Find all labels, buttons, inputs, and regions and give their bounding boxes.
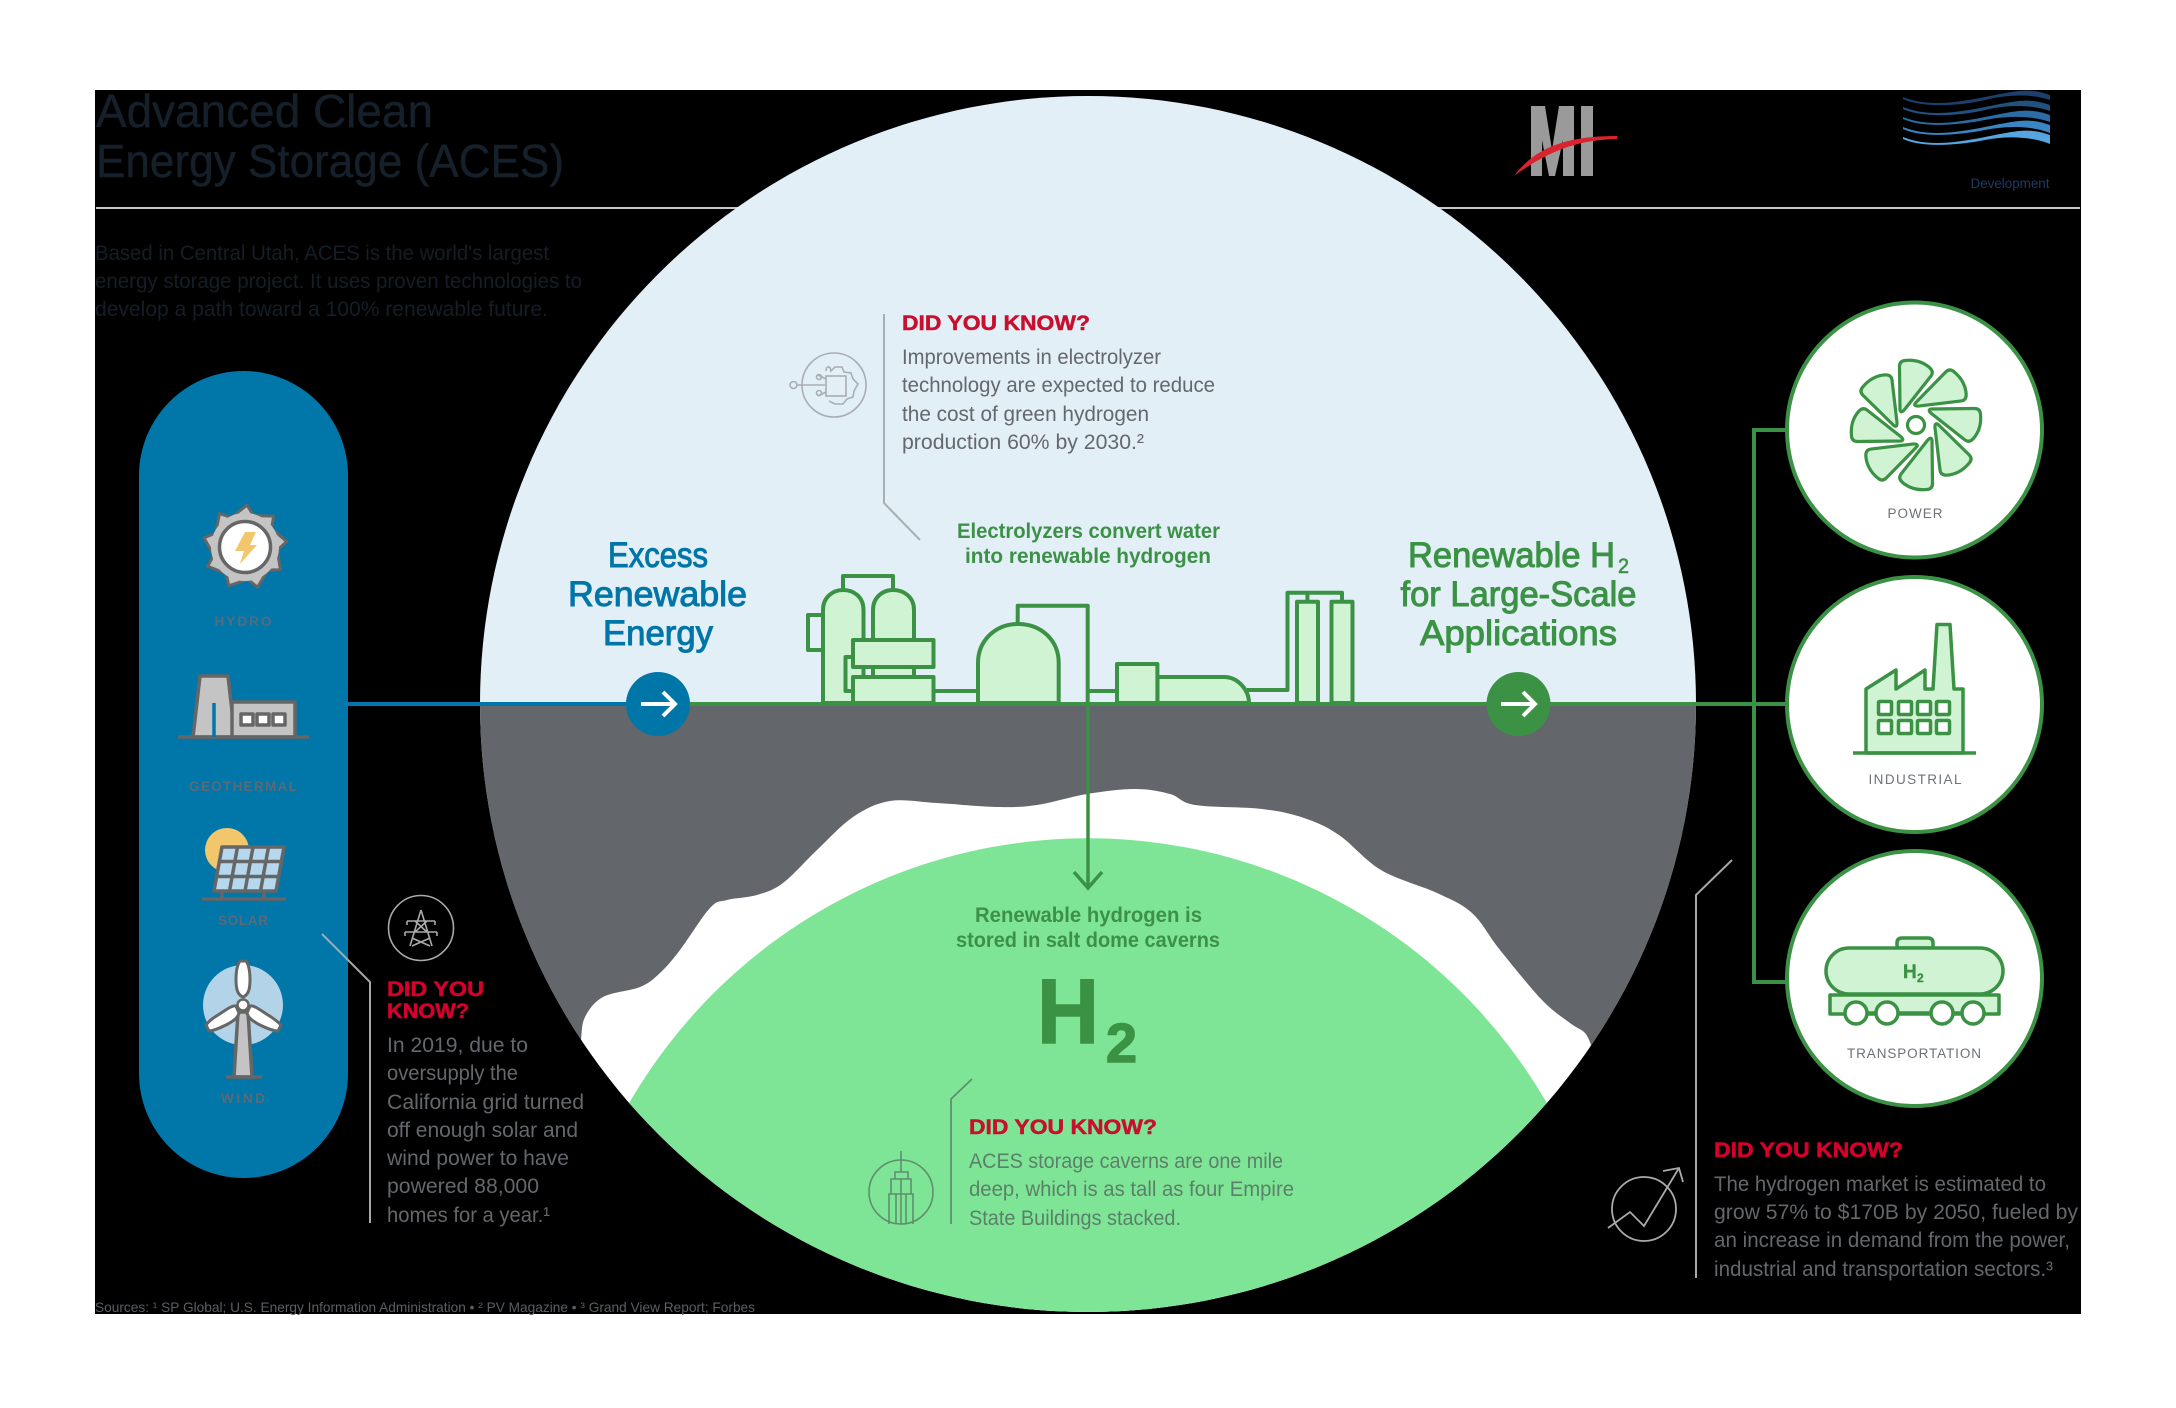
body text: State Buildings stacked. bbox=[969, 1207, 1181, 1230]
header divider bbox=[96, 207, 2080, 209]
heading: renewable H2: for Large-Scale bbox=[1400, 575, 1636, 614]
text: caverns: stored in salt dome caverns bbox=[956, 929, 1220, 952]
heading: renewable H2: Renewable H bbox=[1408, 536, 1615, 575]
heading: excess renewable energy: Excess bbox=[608, 536, 708, 575]
heading: DID YOU KNOW? bbox=[969, 1116, 1157, 1139]
connector: application bus bbox=[1754, 430, 1786, 982]
body text: powered 88,000 bbox=[387, 1175, 539, 1198]
label: TRANSPORTATION bbox=[1847, 1046, 1981, 1061]
callout: hydrogen market bbox=[1608, 860, 2078, 1281]
leader line bbox=[884, 314, 920, 540]
body text: oversupply the bbox=[387, 1062, 518, 1085]
body text: Improvements in electrolyzer bbox=[902, 346, 1161, 369]
heading: renewable H2: Applications bbox=[1420, 614, 1617, 653]
icon: green arrow bbox=[1486, 672, 1550, 736]
body text bbox=[969, 1150, 1294, 1230]
body text: California grid turned bbox=[387, 1091, 584, 1114]
icon: geothermal bbox=[178, 676, 309, 737]
panel: renewable sources pill bbox=[139, 371, 348, 1178]
label: INDUSTRIAL bbox=[1868, 772, 1962, 787]
underground bbox=[480, 706, 1696, 1103]
title: Energy Storage (ACES) bbox=[96, 135, 564, 187]
heading: KNOW? bbox=[387, 1000, 469, 1023]
body text: grow 57% to $170B by 2050, fueled by bbox=[1714, 1201, 2078, 1224]
electrolyzer plant bbox=[808, 576, 1352, 703]
label: geothermal: GEOTHERMAL bbox=[189, 779, 297, 794]
heading: DID YOU bbox=[387, 978, 484, 1001]
body text: an increase in demand from the power, bbox=[1714, 1229, 2070, 1252]
leader line bbox=[951, 1079, 972, 1224]
body text: wind power to have bbox=[386, 1147, 569, 1170]
sources: Sources: ¹ SP Global; U.S. Energy Information Administration • ² PV Magazine • ³ Grand View Report; Forbes bbox=[95, 1299, 755, 1315]
callout: caverns depth bbox=[869, 1079, 1294, 1230]
salt dome bbox=[581, 789, 1592, 1312]
body text: industrial and transportation sectors.³ bbox=[1714, 1258, 2053, 1281]
connector: hydrogen line bbox=[658, 702, 1788, 706]
leader line bbox=[322, 934, 370, 1223]
callout: California oversupply bbox=[322, 896, 584, 1227]
label: wind: WIND bbox=[221, 1091, 265, 1106]
text: electrolyzers: into renewable hydrogen bbox=[965, 545, 1211, 568]
label: hydro: HYDRO bbox=[214, 614, 272, 629]
label: POWER bbox=[1888, 506, 1943, 521]
intro text: energy storage project. It uses proven technologies to bbox=[95, 270, 582, 293]
central tank bbox=[1018, 606, 1117, 703]
icon: chip gear bbox=[790, 353, 866, 417]
leader line bbox=[1696, 860, 1732, 1278]
title: Advanced Clean bbox=[96, 85, 433, 137]
icon: wind bbox=[203, 961, 283, 1077]
heading: excess renewable energy bbox=[568, 536, 747, 653]
heading: excess renewable energy: Energy bbox=[603, 614, 713, 653]
text: caverns bbox=[956, 904, 1220, 952]
heading: renewable H2: 2 bbox=[1618, 555, 1629, 578]
callout: electrolyzer cost bbox=[790, 312, 1215, 540]
body text bbox=[1714, 1173, 2078, 1281]
label: solar: SOLAR bbox=[218, 913, 268, 928]
icon: growth chart bbox=[1608, 1168, 1683, 1241]
body text: ACES storage caverns are one mile bbox=[969, 1150, 1283, 1173]
body text: production 60% by 2030.² bbox=[902, 431, 1144, 454]
hydrogen cavern bbox=[629, 838, 1547, 1312]
right equipment bbox=[1157, 677, 1249, 703]
title bbox=[96, 85, 564, 187]
icon: blue arrow bbox=[626, 672, 690, 736]
H2 symbol: H bbox=[1037, 961, 1099, 1063]
logo: waves and Development: Development bbox=[1970, 175, 2050, 191]
icon: factory bbox=[1853, 624, 1976, 753]
heading: excess renewable energy: Renewable bbox=[568, 575, 747, 614]
body text: homes for a year.¹ bbox=[387, 1204, 550, 1227]
panel: power bbox=[1787, 302, 2042, 558]
arrow: down to caverns bbox=[1074, 704, 1102, 888]
left tanks bbox=[843, 576, 893, 590]
text: electrolyzers: Electrolyzers convert water bbox=[957, 520, 1220, 543]
icon: tanker car bbox=[1826, 938, 2003, 1024]
intro text: Based in Central Utah, ACES is the world's largest bbox=[95, 242, 549, 265]
icon: hydro bbox=[201, 505, 288, 591]
panel: central circle bbox=[480, 96, 1696, 1312]
connector: renewable energy line bbox=[348, 702, 658, 706]
body text: off enough solar and bbox=[387, 1119, 578, 1142]
heading: renewable H2 bbox=[1400, 536, 1636, 653]
heading: DID YOU KNOW? bbox=[902, 312, 1090, 335]
icon: turbine bbox=[1851, 360, 1981, 490]
panel: transportation bbox=[1787, 851, 2042, 1106]
logo: waves and Development bbox=[1903, 91, 2050, 191]
tank label: 2 bbox=[1917, 971, 1924, 985]
heading: DID YOU KNOW? bbox=[1714, 1139, 1903, 1162]
tank label: H bbox=[1903, 962, 1917, 983]
icon: solar bbox=[202, 828, 286, 899]
sky bbox=[480, 96, 1696, 1312]
body text: the cost of green hydrogen bbox=[902, 403, 1149, 426]
body text: deep, which is as tall as four Empire bbox=[969, 1178, 1294, 1201]
icon: empire state building bbox=[869, 1151, 933, 1224]
body text: In 2019, due to bbox=[387, 1034, 528, 1057]
heading bbox=[387, 978, 484, 1023]
text: electrolyzers bbox=[957, 520, 1220, 568]
text: caverns: Renewable hydrogen is bbox=[975, 904, 1202, 927]
H2 symbol: 2 bbox=[1106, 1012, 1137, 1074]
body text: The hydrogen market is estimated to bbox=[1714, 1173, 2046, 1196]
body text bbox=[902, 346, 1215, 454]
body text bbox=[386, 1034, 584, 1227]
icon: transmission tower bbox=[388, 896, 454, 960]
logo: MHI bbox=[1514, 106, 1617, 176]
tank label bbox=[1903, 962, 1924, 985]
intro text: develop a path toward a 100% renewable future. bbox=[95, 298, 548, 321]
body text: technology are expected to reduce bbox=[902, 374, 1215, 397]
H2 symbol bbox=[1037, 961, 1137, 1074]
intro text bbox=[95, 242, 582, 321]
panel: industrial bbox=[1787, 577, 2042, 832]
